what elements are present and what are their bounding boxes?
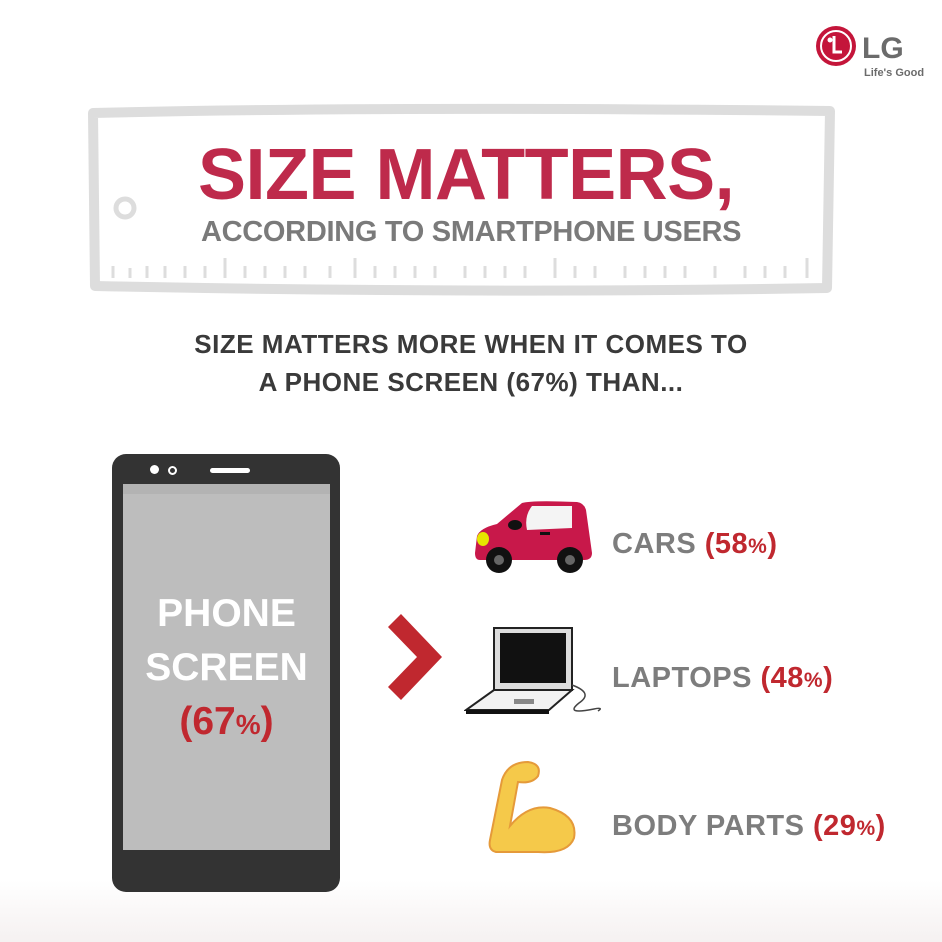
logo: LG: Life's Good bbox=[864, 67, 924, 79]
ruler title panel bbox=[88, 104, 835, 296]
screen text: PHONE bbox=[157, 592, 296, 635]
subheading: SIZE MATTERS MORE WHEN IT COMES TO bbox=[194, 329, 748, 359]
screen text: (67%) bbox=[179, 700, 274, 743]
label: cars: CARS (58%) bbox=[612, 528, 778, 560]
subheading: A PHONE SCREEN (67%) THAN... bbox=[259, 367, 683, 397]
logo: LG: LG bbox=[862, 32, 904, 65]
label: laptops: LAPTOPS (48%) bbox=[612, 662, 833, 694]
label: body parts: BODY PARTS (29%) bbox=[612, 810, 886, 842]
screen text bbox=[145, 592, 308, 743]
phone bbox=[112, 454, 340, 892]
camera dots bbox=[150, 465, 159, 474]
title: SIZE MATTERS, bbox=[198, 135, 734, 215]
screen bbox=[123, 484, 330, 850]
icon: car bbox=[475, 501, 592, 573]
icon: flexed arm bbox=[488, 761, 576, 854]
icon: laptop bbox=[464, 627, 601, 714]
arrow: chevron bbox=[388, 614, 442, 700]
speaker bbox=[210, 468, 250, 473]
subheading bbox=[194, 329, 748, 397]
screen text: SCREEN bbox=[145, 646, 308, 689]
logo: LG bbox=[816, 26, 924, 79]
subtitle: ACCORDING TO SMARTPHONE USERS bbox=[201, 216, 741, 248]
